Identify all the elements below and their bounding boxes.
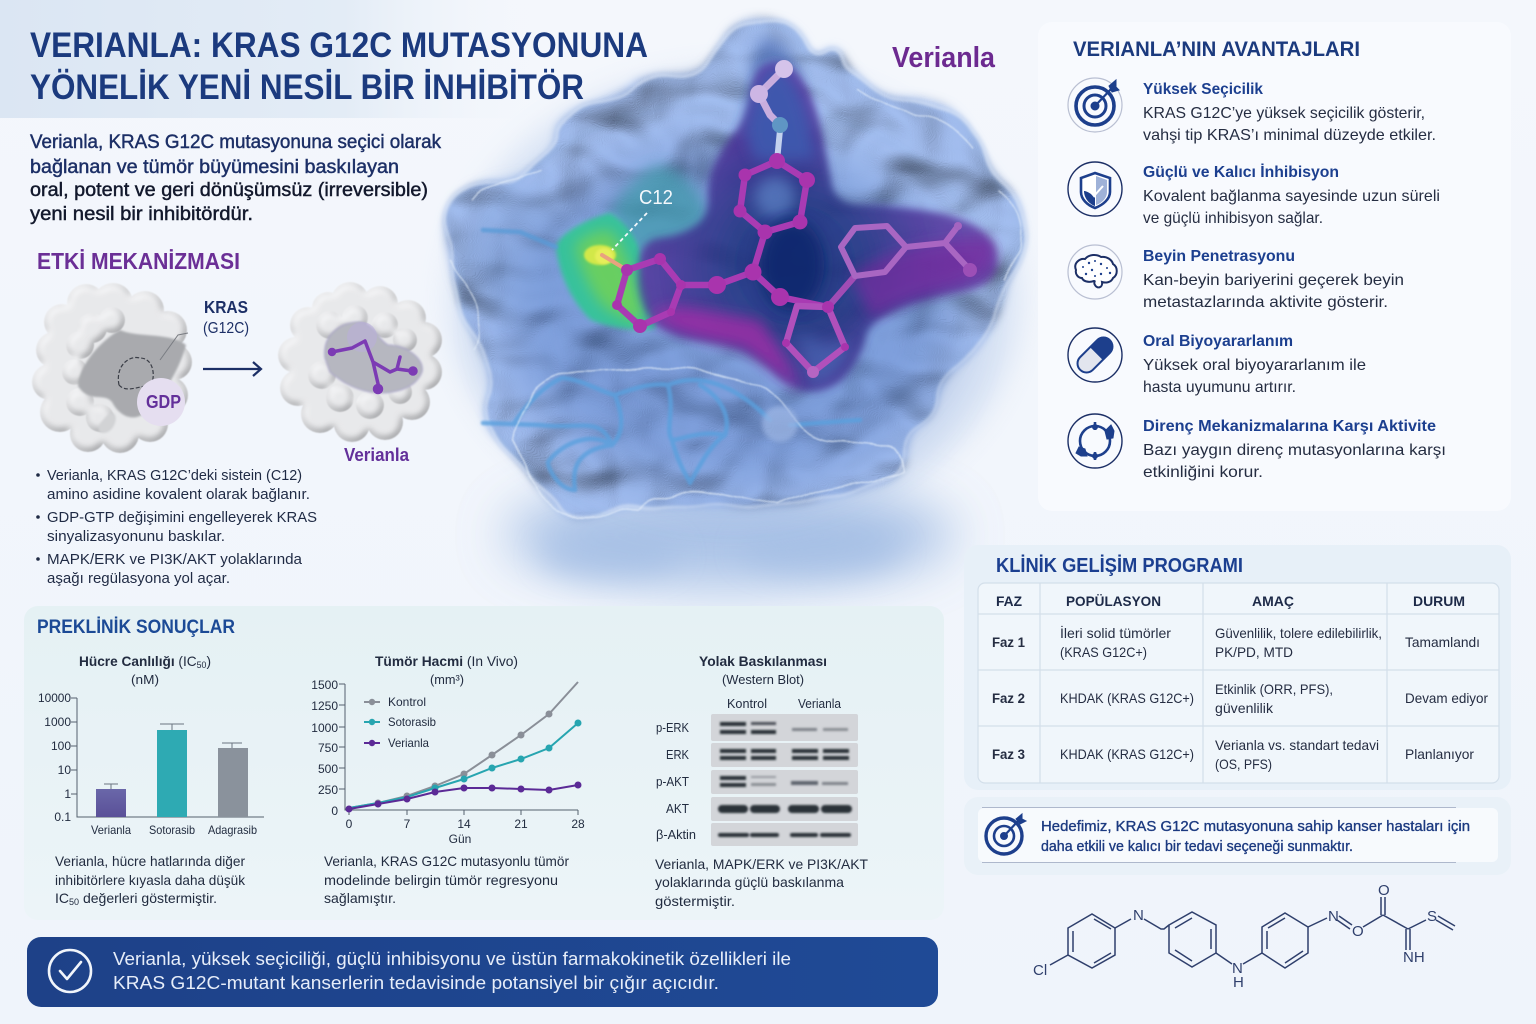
blot caption: Verianla, MAPK/ERK ve PI3K/AKT — [655, 856, 868, 872]
bar chart: cell viability: Hücre Canlılığı (IC — [79, 653, 197, 669]
table rows: güvenlilik — [1215, 700, 1274, 716]
C12 label: C12 — [639, 187, 673, 209]
goal text: Hedefimiz, KRAS G12C mutasyonuna sahip kanser hastaları için — [1041, 818, 1470, 835]
table header: DURUM — [1413, 593, 1465, 609]
mechanism bullets: Verianla, KRAS G12C’deki sistein (C12) — [47, 467, 302, 484]
pocket — [325, 322, 422, 393]
western blot: (Western Blot) — [722, 672, 804, 687]
inner lumps — [62, 307, 125, 432]
mechanism bullets: GDP-GTP değişimini engelleyerek KRAS — [47, 509, 317, 526]
bar chart: cell viability: 1000 — [44, 715, 71, 729]
bar chart: cell viability: 1 — [64, 787, 71, 801]
heading: mechanism: ETKİ MEKANİZMASI — [37, 248, 240, 274]
chemical structure: NH — [1403, 949, 1425, 966]
legend: Sotorasib — [388, 715, 436, 729]
icon: target — [986, 814, 1026, 854]
mechanism bullets: amino asidine kovalent olarak bağlanır. — [47, 486, 310, 503]
KRAS inhibitor-bound protein — [278, 282, 442, 442]
table rows — [992, 624, 1488, 772]
advantage: selectivity: vahşi tip KRAS’ı minimal düzeyde etkiler. — [1143, 127, 1436, 144]
advantage: resistance: Bazı yaygın direnç mutasyonlarına karşı — [1143, 442, 1446, 459]
table rows: Faz 1 — [992, 634, 1025, 650]
advantage: brain penetration — [1068, 245, 1404, 311]
clinical heading: KLİNİK GELİŞİM PROGRAMI — [996, 554, 1243, 577]
western blot — [656, 653, 858, 846]
inhibitor pocket — [638, 63, 997, 391]
bar chart: cell viability: ) — [206, 653, 211, 669]
western blot: ERK — [666, 747, 689, 762]
right pale ring — [841, 226, 970, 276]
western blot: p-ERK — [656, 720, 689, 735]
table rows: KHDAK (KRAS G12C+) — [1060, 746, 1194, 762]
line chart: tumour volume: 750 — [318, 741, 338, 755]
viability caption: değerleri göstermiştir. — [79, 890, 217, 906]
table rows: Etkinlik (ORR, PFS), — [1215, 681, 1333, 697]
KRAS label: KRAS — [204, 297, 248, 317]
bar chart: cell viability: 10 — [58, 763, 71, 777]
title: YÖNELİK YENİ NESİL BİR İNHİBİTÖR — [30, 67, 584, 107]
advantage: brain penetration: Beyin Penetrasyonu — [1143, 248, 1295, 265]
bar chart: cell viability: 100 — [51, 739, 71, 753]
mechanism bullets: sinyalizasyonunu baskılar. — [47, 528, 225, 545]
conclusion banner — [27, 937, 938, 1007]
panel: goal — [964, 797, 1511, 875]
arrow — [203, 362, 261, 376]
advantage: durable inhibition — [1068, 162, 1440, 227]
goal text — [1041, 818, 1470, 855]
title — [30, 25, 648, 107]
GDP circle: GDP — [146, 392, 181, 412]
series: Kontrol — [349, 682, 578, 808]
table rows: (OS, PFS) — [1215, 756, 1272, 772]
banner text — [113, 948, 791, 993]
advantage: brain penetration: Kan-beyin bariyerini geçerek beyin — [1143, 272, 1404, 289]
bar chart: cell viability: 0.1 — [54, 810, 71, 824]
advantage: brain penetration: metastazlarında aktivite gösterir. — [1143, 294, 1388, 311]
mechanism bullets: aşağı regülasyona yol açar. — [47, 570, 230, 587]
title: VERIANLA: KRAS G12C MUTASYONUNA — [30, 25, 648, 65]
advantage: oral bioavailability — [1068, 328, 1366, 396]
banner text: KRAS G12C-mutant kanserlerin tedavisinde potansiyel bir çığır açıcıdır. — [113, 972, 719, 993]
icon: target — [1068, 78, 1122, 132]
bar chart: cell viability: 50 — [197, 660, 206, 670]
goal text: daha etkili ve kalıcı bir tedavi seçeneği sunmaktır. — [1041, 838, 1353, 855]
clinical table — [978, 583, 1499, 783]
line chart: tumour volume: 1500 — [311, 678, 338, 692]
table header — [996, 593, 1465, 609]
line chart: tumour volume: (mm³) — [430, 672, 464, 687]
top ring — [617, 161, 855, 372]
blot caption — [655, 856, 868, 909]
western blot: Yolak Baskılanması — [699, 653, 827, 669]
series: Sotorasib — [349, 720, 581, 808]
green link bond — [602, 255, 627, 270]
panel: advantages — [1038, 22, 1511, 511]
series: Verianla — [346, 782, 581, 812]
glass bubble outlines — [452, 90, 1020, 518]
top pale arm — [750, 60, 793, 161]
table rows: Güvenlilik, tolere edilebilirlik, — [1215, 625, 1382, 641]
ligand — [330, 341, 416, 392]
table rows: Tamamlandı — [1405, 634, 1480, 650]
advantage: resistance — [1068, 414, 1446, 481]
chemical structure: O — [1352, 923, 1364, 940]
atoms — [612, 153, 977, 378]
chemical structure: H — [1233, 974, 1244, 991]
western blot: Kontrol — [727, 697, 767, 711]
panel: preclinical results — [24, 606, 944, 920]
chemical structure — [1033, 882, 1455, 991]
advantage: durable inhibition: ve güçlü inhibisyon sağlar. — [1143, 210, 1323, 227]
intro paragraph: yeni nesil bir inhibitördür. — [30, 203, 253, 225]
intro paragraph: oral, potent ve geri dönüşümsüz (irreversible) — [30, 179, 428, 201]
line chart: tumour volume: 0 — [331, 804, 338, 818]
line chart: tumour volume: 28 — [571, 817, 585, 831]
advantage: selectivity: KRAS G12C’ye yüksek seçicilik gösterir, — [1143, 105, 1425, 122]
western blot: p-AKT — [656, 774, 689, 789]
tumour caption: sağlamıştır. — [324, 890, 396, 906]
table header: POPÜLASYON — [1066, 593, 1161, 609]
legend: Verianla — [388, 736, 429, 750]
mechanism bullets: MAPK/ERK ve PI3K/AKT yolaklarında — [47, 551, 303, 568]
table rows: KHDAK (KRAS G12C+) — [1060, 690, 1194, 706]
pocket tones — [652, 65, 993, 390]
chemical structure: N — [1328, 908, 1339, 925]
advantage: resistance: etkinliğini korur. — [1143, 464, 1263, 481]
line chart: tumour volume — [311, 653, 585, 846]
advantage: resistance: Direnç Mekanizmalarına Karşı Aktivite — [1143, 418, 1436, 435]
western blot: Verianla — [798, 697, 841, 711]
viability caption: IC — [55, 890, 69, 906]
icon: shield — [1068, 162, 1122, 216]
table rows: Planlanıyor — [1405, 746, 1474, 762]
inner lumps — [308, 305, 417, 419]
GDP circle — [137, 378, 185, 426]
icon: check — [49, 950, 91, 992]
panel: clinical programme — [964, 545, 1511, 790]
KRAS label: (G12C) — [203, 320, 249, 337]
Verianla label: Verianla — [892, 42, 996, 74]
viability caption: Verianla, hücre hatlarında diğer — [55, 853, 245, 869]
binding site dashes — [118, 357, 153, 389]
chemical structure: Cl — [1033, 962, 1047, 979]
bar chart: cell viability — [38, 653, 264, 837]
bar chart: cell viability: Sotorasib — [149, 823, 195, 837]
western blot: AKT — [666, 801, 689, 816]
preclinical heading: PREKLİNİK SONUÇLAR — [37, 617, 235, 638]
mechanism bullets — [36, 467, 317, 587]
table rows: Faz 3 — [992, 746, 1025, 762]
chemical structure: S — [1427, 908, 1437, 925]
bar chart: cell viability: Adagrasib — [208, 823, 257, 837]
KRAS label — [203, 297, 249, 337]
table rows: Devam ediyor — [1405, 690, 1488, 706]
table rows: İleri solid tümörler — [1060, 624, 1171, 641]
bar chart: cell viability: 10000 — [38, 691, 71, 705]
protein surface — [445, 19, 1021, 518]
chemical structure: N — [1232, 960, 1243, 977]
legend: Kontrol — [388, 695, 426, 709]
lower helix network — [483, 230, 860, 490]
Verianla bound label: Verianla — [344, 445, 410, 465]
intro paragraph — [30, 131, 441, 225]
KRAS GDP-bound protein — [32, 283, 192, 453]
C12 label — [612, 187, 673, 250]
advantage: oral bioavailability: Yüksek oral biyoyararlanım ile — [1143, 357, 1366, 374]
tumour caption: Verianla, KRAS G12C mutasyonlu tümör — [324, 853, 569, 869]
line chart: tumour volume: 1000 — [311, 721, 338, 735]
line chart: tumour volume: Tümör Hacmi (In Vivo) — [375, 653, 518, 669]
icon: resistance ring — [1068, 414, 1122, 468]
chemical structure: O — [1378, 882, 1390, 899]
tumour caption — [324, 853, 569, 906]
advantage: oral bioavailability: Oral Biyoyararlanım — [1143, 333, 1293, 350]
chemical structure: N — [1133, 907, 1144, 924]
advantage: durable inhibition: Güçlü ve Kalıcı İnhibisyon — [1143, 163, 1339, 181]
icon: capsule — [1068, 328, 1122, 382]
line chart: tumour volume: Gün — [449, 832, 471, 846]
western blot: β-Aktin — [656, 827, 696, 842]
advantage: oral bioavailability: hasta uyumunu artırır. — [1143, 379, 1296, 396]
viability caption — [55, 853, 246, 907]
tumour caption: modelinde belirgin tümör regresyonu — [324, 872, 558, 888]
line chart: tumour volume: 500 — [318, 762, 338, 776]
line chart: tumour volume: 21 — [514, 817, 528, 831]
viability caption: 50 — [69, 897, 79, 907]
table rows: Faz 2 — [992, 690, 1025, 706]
Verianla ligand sticks — [602, 60, 977, 378]
table rows: PK/PD, MTD — [1215, 644, 1293, 660]
table header: FAZ — [996, 593, 1022, 609]
line chart: tumour volume: 7 — [404, 817, 411, 831]
icon: brain — [1068, 245, 1122, 299]
blot caption: yolaklarında güçlü baskılanma — [655, 874, 844, 890]
legend — [364, 695, 436, 750]
dark tip column — [720, 38, 817, 190]
line chart: tumour volume: 250 — [318, 783, 338, 797]
advantage: selectivity: Yüksek Seçicilik — [1143, 81, 1263, 98]
table rows: Verianla vs. standart tedavi — [1215, 737, 1379, 753]
intro paragraph: bağlanan ve tümör büyümesini baskılayan — [30, 156, 399, 178]
cavity — [78, 330, 186, 417]
advantage: selectivity — [1068, 78, 1436, 144]
green binding site around C12 — [556, 165, 712, 330]
bar chart: cell viability: Verianla — [91, 823, 131, 837]
protein illustration — [445, 19, 1021, 587]
protein haze below — [450, 70, 1020, 587]
table header: AMAÇ — [1252, 593, 1294, 609]
blot caption: göstermiştir. — [655, 893, 735, 909]
advantages heading: VERIANLA’NIN AVANTAJLARI — [1073, 37, 1360, 61]
line chart: tumour volume: 14 — [457, 817, 471, 831]
highlight bubble — [762, 406, 798, 442]
table rows: (KRAS G12C+) — [1060, 644, 1147, 660]
bar chart: cell viability: (nM) — [131, 672, 159, 687]
line chart: tumour volume: 0 — [346, 817, 353, 831]
advantage: durable inhibition: Kovalent bağlanma sayesinde uzun süreli — [1143, 188, 1440, 205]
viability caption: inhibitörlere kıyasla daha düşük — [55, 872, 246, 888]
line chart: tumour volume: 1250 — [311, 699, 338, 713]
intro paragraph: Verianla, KRAS G12C mutasyonuna seçici olarak — [30, 131, 441, 153]
banner text: Verianla, yüksek seçiciliği, güçlü inhibisyonu ve üstün farmakokinetik özellikleri ile — [113, 948, 791, 969]
